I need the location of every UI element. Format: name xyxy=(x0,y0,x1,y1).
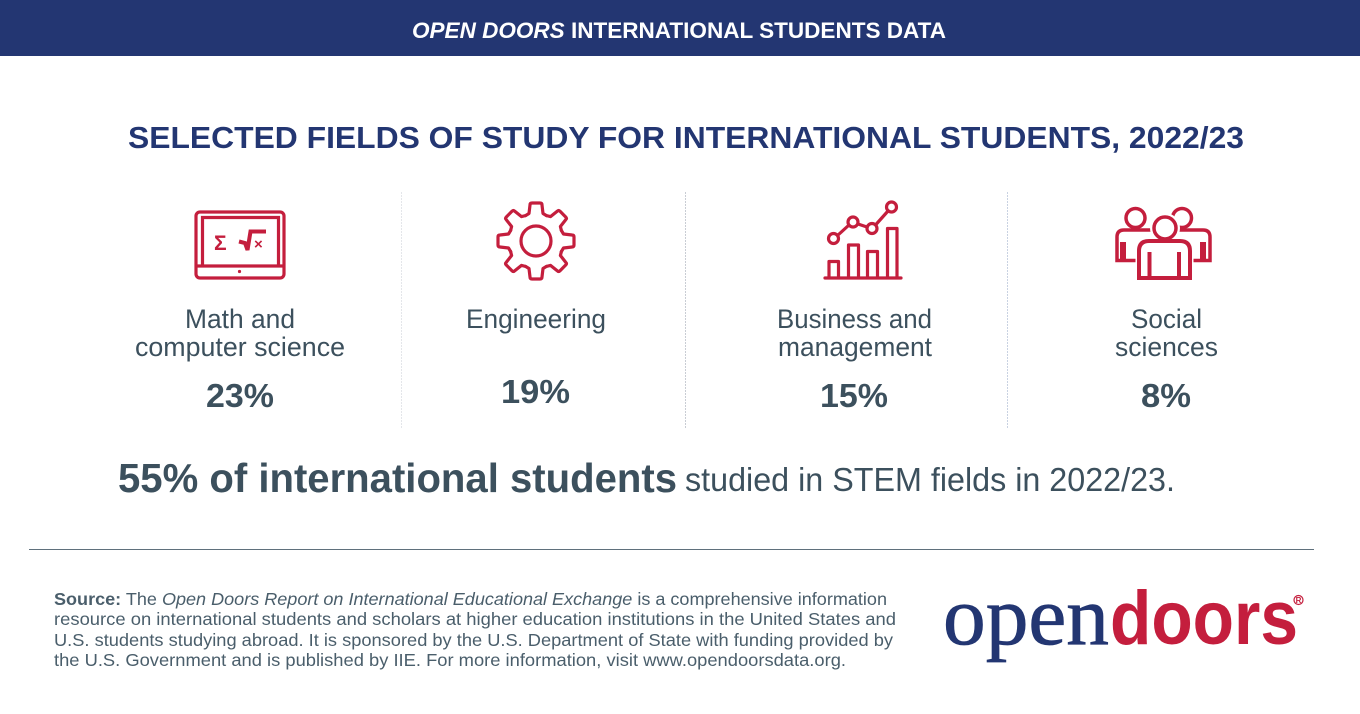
panel: math and computer science xyxy=(135,212,345,414)
logo: open doors: doors xyxy=(1110,576,1298,661)
logo: open doors: open xyxy=(943,570,1109,663)
source note: Source: The Open Doors Report on International Educational Exchange is a comprehensive information xyxy=(54,589,887,609)
source note: the U.S. Government and is published by IIE. For more information, visit www.opendoorsdata.org. xyxy=(54,650,846,670)
stem callout: 55% of international students xyxy=(118,455,677,501)
panel: social sciences: sciences xyxy=(1115,332,1218,362)
icon: laptop with formulas: × xyxy=(254,236,263,253)
label: Social xyxy=(1131,304,1202,334)
icon: laptop with formulas: Σ xyxy=(214,232,227,255)
title: SELECTED FIELDS OF STUDY FOR INTERNATIONAL STUDENTS, 2022/23 xyxy=(128,120,1244,155)
source note xyxy=(54,589,896,670)
stem callout: studied in STEM fields in 2022/23. xyxy=(685,461,1175,498)
panel: math and computer science: computer science xyxy=(135,332,345,362)
header banner: OPEN DOORS INTERNATIONAL STUDENTS DATA xyxy=(412,18,946,43)
label: Business and xyxy=(777,304,932,334)
value: 19% xyxy=(501,373,570,410)
logo: open doors: R xyxy=(1296,596,1302,605)
value: 15% xyxy=(820,377,888,414)
icon: gear xyxy=(498,203,574,279)
value: 8% xyxy=(1141,377,1191,414)
source note: resource on international students and scholars at higher education institutions in the United States and xyxy=(54,609,896,629)
panel: social sciences xyxy=(1115,208,1218,414)
panel: engineering xyxy=(466,203,606,410)
source note: U.S. students studying abroad. It is sponsored by the U.S. Department of State with funding provided by xyxy=(54,630,893,650)
logo: open doors xyxy=(943,570,1303,663)
header banner xyxy=(0,0,1360,56)
icon: bar chart with trend line xyxy=(825,202,901,278)
panel: business and management: management xyxy=(778,332,932,362)
label: Engineering xyxy=(466,304,606,334)
icon: laptop with formulas xyxy=(196,212,284,278)
icon: group of people xyxy=(1117,208,1210,278)
label: Math and xyxy=(185,304,295,334)
value: 23% xyxy=(206,377,274,414)
stem callout xyxy=(118,455,1175,501)
panel: business and management xyxy=(777,202,932,414)
